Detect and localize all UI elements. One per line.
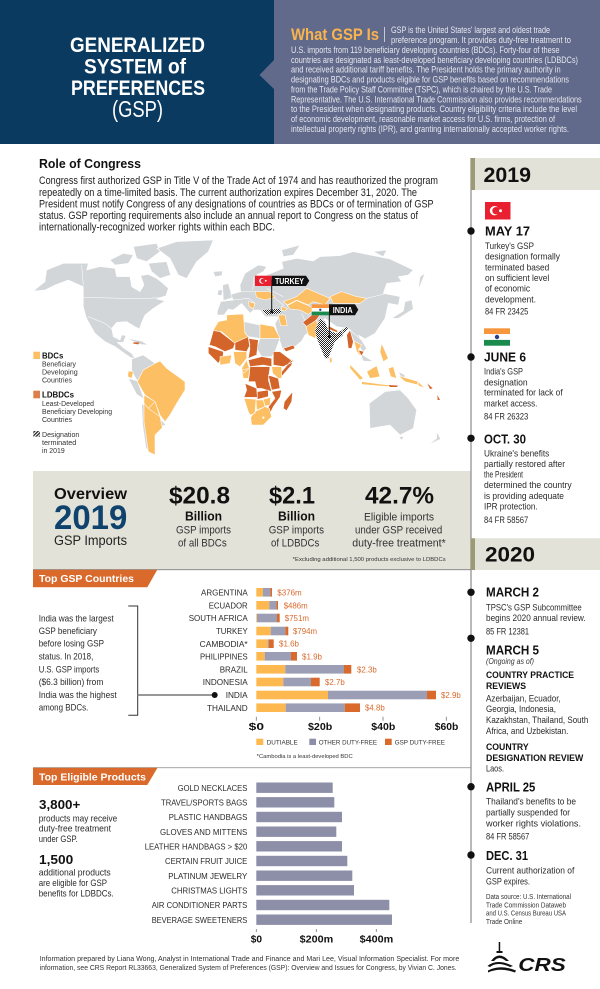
legend: BDCs: BDCs bbox=[42, 350, 64, 360]
footer credit: Information prepared by Liana Wong, Analyst in International Trade and Finance and Mari Lee, Visual Information Specialist. For more bbox=[40, 954, 459, 963]
overview heading: GSP Imports bbox=[54, 533, 127, 548]
event: March 5: Laos. bbox=[486, 764, 504, 775]
bracket connector to India bbox=[128, 606, 218, 715]
product labels: LEATHER HANDBAGS > $20 bbox=[145, 842, 248, 852]
stat: BDC imports: $20.8 bbox=[169, 482, 230, 509]
text block: role of Congress bbox=[39, 175, 438, 234]
text block: what GSP is bbox=[291, 25, 582, 134]
bar: Brazil: $2.3b bbox=[357, 664, 377, 674]
products axis bbox=[251, 929, 393, 945]
event: March 5: (Ongoing as of) bbox=[486, 657, 534, 666]
data source: Trade Online bbox=[486, 919, 522, 926]
event: March 5: COUNTRY PRACTICE bbox=[486, 670, 574, 681]
data source bbox=[486, 894, 571, 926]
bar: South Africa: $751m bbox=[285, 613, 309, 623]
footer credit bbox=[40, 954, 459, 972]
stat: duty-free share: *Excluding additional 1,500 products exclusive to LDBDCs bbox=[293, 557, 446, 563]
event: Oct. 30: is providing adequate bbox=[484, 491, 564, 502]
bar chart: top GSP countries bbox=[189, 587, 461, 760]
text block: role of Congress: Congress first authorized GSP in Title V of the Trade Act of 1974 and has reauthorized the program bbox=[39, 175, 438, 187]
event: Dec. 31: DEC. 31 bbox=[486, 849, 528, 863]
chart axis: $60b bbox=[435, 721, 458, 733]
chart legend: DUTIABLE bbox=[267, 740, 298, 747]
event: Dec. 31: Current authorization of bbox=[486, 866, 575, 877]
callout: India note: ($6.3 billion) from bbox=[39, 677, 104, 687]
stat: 1,500 products: 1,500 bbox=[39, 852, 73, 867]
stat: LDBDC imports bbox=[269, 482, 324, 550]
event: May 17: MAY 17 bbox=[485, 224, 530, 238]
bar: India bbox=[226, 690, 461, 700]
event: March 5: MARCH 5 bbox=[486, 644, 539, 658]
text block: role of Congress: repeatedly on a time-limited basis. The current authorization expires December 31, 2020. The bbox=[39, 187, 417, 199]
bar: Indonesia bbox=[203, 677, 345, 687]
bar: Cambodia: CAMBODIA* bbox=[200, 639, 248, 649]
event: June 6: 84 FR 26323 bbox=[484, 412, 528, 422]
legend: BDCs bbox=[33, 350, 78, 384]
icon: Turkey flag bbox=[485, 202, 510, 220]
year header: 2020: 2020 bbox=[485, 544, 535, 567]
bar: Brazil: BRAZIL bbox=[220, 664, 248, 674]
stat: 3,800+ products: duty-free treatment bbox=[39, 824, 111, 834]
legend: LDBDCs: Least-Developed bbox=[42, 399, 94, 408]
legend: LDBDCs: LDBDCs bbox=[42, 390, 74, 400]
event: April 25: worker rights violations. bbox=[485, 818, 581, 829]
stat: duty-free share: duty-free treatment* bbox=[352, 538, 446, 550]
legend: BDCs: Countries bbox=[42, 376, 72, 384]
stat: duty-free share: Eligible imports bbox=[364, 512, 434, 524]
stat: LDBDC imports: of LDBDCs bbox=[271, 538, 320, 550]
map callout: Turkey: TURKEY bbox=[275, 277, 305, 286]
stat: BDC imports bbox=[169, 482, 231, 550]
event: March 5: Georgia, Indonesia, bbox=[486, 704, 556, 715]
heading tab: top GSP countries: Top GSP Countries bbox=[39, 573, 134, 585]
bar: India: $2.9b bbox=[441, 690, 461, 700]
legend: designation terminated: Designation bbox=[42, 430, 79, 439]
heading: role of Congress: Role of Congress bbox=[39, 157, 141, 171]
event: May 17: development. bbox=[485, 294, 536, 305]
bar: Turkey: TURKEY bbox=[216, 626, 248, 636]
bar chart: top eligible products bbox=[256, 782, 392, 925]
callout: India note bbox=[39, 613, 117, 713]
stat: duty-free share: under GSP received bbox=[355, 524, 442, 536]
icon: India flag bbox=[484, 328, 510, 346]
stat: LDBDC imports: $2.1 bbox=[269, 482, 315, 509]
product labels: TRAVEL/SPORTS BAGS bbox=[161, 798, 248, 808]
text block: role of Congress: status. GSP reporting requirements also include an annual report to Congress on the status of bbox=[39, 210, 419, 222]
legend: designation terminated: terminated bbox=[42, 438, 76, 447]
event: June 6 bbox=[467, 351, 563, 422]
callout: India note: among BDCs. bbox=[39, 703, 88, 713]
event: March 5: Africa, and Uzbekistan. bbox=[486, 726, 568, 737]
chart legend bbox=[256, 739, 445, 747]
event: Oct. 30: IPR protection. bbox=[484, 502, 538, 513]
legend: LDBDCs: Beneficiary Developing bbox=[42, 407, 112, 416]
year header: 2020 bbox=[471, 538, 600, 570]
event: May 17: Turkey's GSP bbox=[485, 241, 534, 252]
logo: CRS: CRS bbox=[518, 955, 566, 975]
stat: LDBDC imports: Billion bbox=[278, 509, 315, 523]
bar: Turkey bbox=[216, 626, 317, 636]
event: Oct. 30: the President bbox=[484, 470, 523, 481]
bar: Argentina: ARGENTINA bbox=[201, 588, 248, 598]
title: PREFERENCES bbox=[71, 77, 205, 100]
event: May 17 bbox=[467, 224, 560, 317]
event: Oct. 30: determined the country bbox=[484, 480, 572, 491]
bar: Thailand bbox=[207, 703, 385, 713]
callout: India note: India was the largest bbox=[39, 613, 114, 623]
stat: 3,800+ products: products may receive bbox=[39, 813, 117, 823]
data source: Trade Commission Dataweb bbox=[486, 903, 566, 910]
legend: LDBDCs bbox=[33, 390, 112, 424]
legend: LDBDCs: Countries bbox=[42, 415, 72, 424]
event: April 25: Thailand's benefits to be bbox=[486, 797, 576, 808]
event: May 17: of economic bbox=[485, 284, 530, 295]
event: March 5 bbox=[467, 635, 588, 775]
event: June 6: terminated for lack of bbox=[484, 388, 563, 399]
product labels: CERTAIN FRUIT JUICE bbox=[165, 856, 248, 866]
stat: 3,800+ products: 3,800+ bbox=[39, 797, 81, 812]
panel: role of Congress bbox=[39, 157, 438, 234]
event: June 6: JUNE 6 bbox=[484, 351, 526, 365]
bar: Argentina: $376m bbox=[277, 587, 302, 597]
event: March 5: Azerbaijan, Ecuador, bbox=[486, 693, 561, 704]
products axis: $400m bbox=[360, 933, 393, 945]
stat: 1,500 products: benefits for LDBDCs. bbox=[39, 889, 114, 899]
map callout: India: INDIA bbox=[333, 306, 353, 315]
year header: 2019: 2019 bbox=[484, 164, 531, 187]
bar: Philippines bbox=[200, 651, 322, 662]
map legend bbox=[33, 350, 112, 455]
stat: BDC imports: Billion bbox=[185, 509, 222, 523]
event: Dec. 31 bbox=[467, 849, 575, 887]
callout: India note: before losing GSP bbox=[39, 639, 104, 649]
product labels bbox=[145, 783, 248, 925]
logo: CRS bbox=[488, 942, 566, 975]
bar: Thailand: $4.8b bbox=[365, 703, 385, 713]
product labels: CHRISTMAS LIGHTS bbox=[171, 886, 248, 896]
event: May 17: on sufficient level bbox=[485, 273, 549, 284]
title: (GSP) bbox=[112, 96, 163, 122]
event: March 2: 85 FR 12381 bbox=[486, 626, 529, 636]
map callout: Turkey bbox=[255, 276, 309, 313]
stat: duty-free share bbox=[293, 482, 446, 563]
bar: Philippines: PHILIPPINES bbox=[200, 652, 248, 662]
bar: Brazil bbox=[220, 664, 377, 674]
stat: 1,500 products bbox=[39, 852, 114, 899]
panel: overview 2019 bbox=[33, 471, 471, 570]
event: March 2 bbox=[467, 586, 586, 636]
product labels: PLATINUM JEWELRY bbox=[168, 871, 248, 881]
stat: BDC imports: GSP imports bbox=[176, 524, 231, 536]
event: March 5: DESIGNATION REVIEW bbox=[486, 753, 583, 764]
stat: LDBDC imports: GSP imports bbox=[269, 524, 324, 536]
text block: what GSP is: GSP is the United States' largest and oldest trade bbox=[391, 25, 550, 35]
bar: South Africa bbox=[189, 613, 309, 623]
footer credit: information, see CRS Report RL33663, Generalized System of Preferences (GSP): Overview and Issues for Congress, by Vivian C. Jones. bbox=[40, 963, 457, 972]
bar: Cambodia bbox=[200, 639, 299, 649]
panel: top GSP countries bbox=[33, 570, 461, 760]
product labels: BEVERAGE SWEETENERS bbox=[152, 915, 248, 925]
product labels: GLOVES AND MITTENS bbox=[160, 827, 248, 837]
chart axis bbox=[249, 717, 458, 733]
products axis: $200m bbox=[300, 933, 333, 945]
bar: Thailand: THAILAND bbox=[207, 703, 248, 713]
heading tab: top eligible products: Top Eligible Products bbox=[39, 772, 146, 784]
chart footnote: *Cambodia is a least-developed BDC bbox=[257, 754, 353, 760]
bar: Indonesia: INDONESIA bbox=[203, 677, 248, 687]
event: Oct. 30 bbox=[467, 432, 572, 525]
chart legend: GSP DUTY-FREE bbox=[395, 740, 445, 747]
icon: capitol dome bbox=[488, 942, 516, 972]
event: Oct. 30: 84 FR 58567 bbox=[484, 515, 528, 525]
stat: duty-free share: 42.7% bbox=[365, 482, 434, 509]
products axis: $0 bbox=[251, 933, 262, 945]
legend: BDCs: Developing bbox=[42, 368, 78, 376]
chart axis: $0 bbox=[249, 721, 264, 733]
text block: role of Congress: internationally-recognized worker rights within each BDC. bbox=[39, 222, 275, 234]
bar: India: INDIA bbox=[226, 690, 248, 700]
overview heading bbox=[54, 486, 128, 548]
event: May 17: terminated based bbox=[485, 262, 549, 273]
bar: Indonesia: $2.7b bbox=[325, 677, 345, 687]
event: April 25: APRIL 25 bbox=[486, 781, 535, 795]
event: April 25 bbox=[467, 781, 581, 842]
event: Oct. 30: partially restored after bbox=[484, 459, 565, 470]
stat: 1,500 products: additional products bbox=[39, 868, 111, 878]
event: March 2: begins 2020 annual review. bbox=[486, 613, 586, 624]
text block: what GSP is: preference program. It provides duty-free treatment to bbox=[391, 35, 571, 45]
legend: designation terminated: in 2019 bbox=[42, 446, 65, 455]
event: March 5: REVIEWS bbox=[486, 681, 526, 692]
bar: Cambodia: $1.6b bbox=[279, 639, 299, 649]
event: June 6: market access. bbox=[484, 398, 537, 409]
text block: role of Congress: President must notify Congress of any designations of countries as BDCs or of termination of GSP bbox=[39, 198, 434, 210]
data source: and U.S. Census Bureau USA bbox=[486, 911, 566, 918]
panel: top eligible products bbox=[33, 767, 471, 945]
stat: 3,800+ products: under GSP. bbox=[39, 834, 78, 844]
event: Oct. 30: Ukraine's benefits bbox=[484, 448, 550, 459]
panel: timeline bbox=[467, 158, 600, 926]
year header: 2019 bbox=[471, 158, 600, 190]
heading tab: top GSP countries bbox=[33, 570, 157, 587]
stat: BDC imports: of all BDCs bbox=[178, 538, 227, 550]
overview heading: 2019 bbox=[54, 499, 127, 537]
stat: 3,800+ products bbox=[39, 797, 117, 844]
legend: designation terminated bbox=[33, 430, 79, 455]
chart legend: OTHER DUTY-FREE bbox=[319, 740, 377, 747]
event: April 25: 84 FR 58567 bbox=[486, 832, 529, 842]
callout: India note: GSP beneficiary bbox=[39, 626, 97, 636]
bar: Philippines: $1.9b bbox=[302, 651, 322, 661]
event: June 6: India's GSP bbox=[484, 367, 523, 378]
data source: Data source: U.S. International bbox=[486, 894, 571, 901]
bar: Turkey: $794m bbox=[293, 626, 317, 636]
heading: what GSP is: What GSP Is bbox=[291, 26, 379, 44]
bar: Ecuador: $486m bbox=[284, 600, 308, 610]
product labels: GOLD NECKLACES bbox=[178, 783, 248, 793]
event: March 2: MARCH 2 bbox=[486, 586, 539, 600]
overview heading: Overview bbox=[54, 486, 128, 503]
product labels: AIR CONDITIONER PARTS bbox=[152, 900, 248, 910]
callout: India note: status. In 2018, bbox=[39, 651, 93, 661]
chart axis: $20b bbox=[308, 721, 332, 733]
title: SYSTEM of bbox=[84, 56, 187, 78]
event: May 17: 84 FR 23425 bbox=[485, 307, 528, 317]
event: May 17: designation formally bbox=[485, 252, 560, 263]
event: Dec. 31: GSP expires. bbox=[486, 876, 530, 887]
bar: Argentina bbox=[201, 587, 302, 598]
event: March 5: COUNTRY bbox=[486, 742, 529, 753]
event: April 25: partially suspended for bbox=[486, 807, 570, 818]
world map bbox=[33, 240, 441, 455]
bar: Ecuador bbox=[209, 600, 308, 610]
title: GENERALIZED bbox=[70, 34, 205, 57]
panel: what GSP is bbox=[260, 0, 600, 144]
heading tab: top eligible products bbox=[33, 768, 158, 785]
product labels: PLASTIC HANDBAGS bbox=[169, 812, 248, 822]
map callout: India bbox=[312, 304, 358, 338]
event: Oct. 30: OCT. 30 bbox=[484, 432, 526, 446]
bar: South Africa: SOUTH AFRICA bbox=[189, 613, 248, 623]
callout: India note: U.S. GSP imports bbox=[39, 664, 100, 674]
stat: 1,500 products: are eligible for GSP bbox=[39, 878, 107, 888]
legend: BDCs: Beneficiary bbox=[42, 360, 76, 368]
chart axis: $40b bbox=[371, 721, 395, 733]
title bbox=[70, 34, 205, 122]
event: June 6: designation bbox=[484, 377, 528, 388]
bar: Ecuador: ECUADOR bbox=[209, 600, 248, 610]
panel: title header bbox=[0, 0, 274, 144]
callout: India note: India was the highest bbox=[39, 690, 117, 700]
